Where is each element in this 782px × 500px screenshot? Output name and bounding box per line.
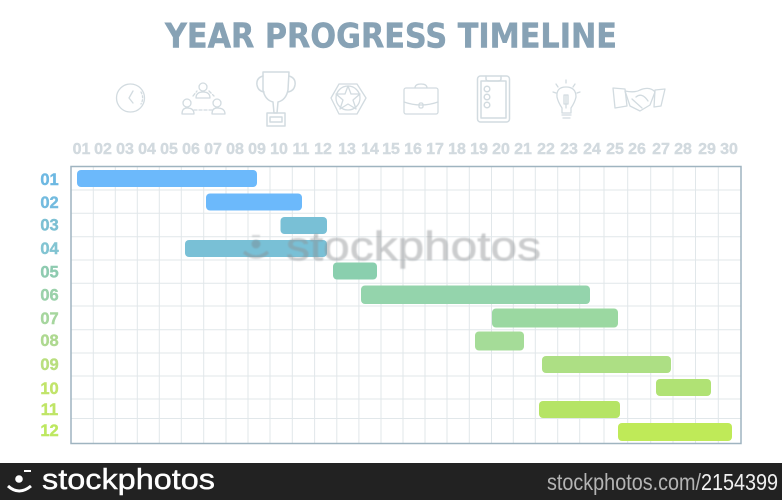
icon: handshake: [613, 88, 665, 111]
day number axis: 04: [138, 141, 156, 158]
gantt bars: [77, 170, 732, 441]
icon: clock: [116, 84, 144, 112]
month labels: 10: [40, 380, 59, 398]
icon row: [116, 72, 665, 126]
month labels: [40, 171, 59, 440]
day number axis: 03: [116, 141, 134, 158]
month labels: 11: [41, 401, 58, 419]
icon: briefcase: [404, 84, 438, 114]
day number axis: 22: [537, 141, 555, 158]
day number axis: 24: [583, 141, 601, 158]
icon: hexagon star badge: [331, 84, 366, 114]
day number axis: 05: [160, 141, 178, 158]
icon: clipboard checklist: [478, 76, 510, 122]
month labels: 07: [40, 310, 59, 328]
footer logo icon: [8, 470, 31, 491]
month labels: 01: [40, 171, 59, 189]
month labels: 03: [40, 216, 59, 234]
footer bar: [0, 463, 782, 500]
day number axis: 07: [204, 141, 222, 158]
day number axis: 18: [448, 141, 466, 158]
day number axis: 23: [560, 141, 578, 158]
watermark: stockphotos: [286, 223, 541, 269]
month labels: 05: [40, 264, 59, 282]
day number axis: 02: [94, 141, 112, 158]
day number axis: 20: [492, 141, 510, 158]
day number axis: 14: [361, 141, 379, 158]
day number axis: 26: [628, 141, 646, 158]
day number axis: 17: [426, 141, 444, 158]
footer logo text: stockphotos: [42, 464, 215, 496]
icon: team network: [182, 83, 225, 114]
day number axis: 28: [674, 141, 692, 158]
day number axis: 12: [314, 141, 332, 158]
day number axis: 16: [404, 141, 422, 158]
month labels: 02: [40, 194, 59, 212]
day number axis: 19: [470, 141, 488, 158]
day number axis: 06: [182, 141, 200, 158]
month labels: 04: [40, 240, 59, 258]
month labels: 09: [40, 356, 59, 374]
day number axis: 01: [73, 141, 90, 158]
title: YEAR PROGRESS TIMELINE: [164, 16, 617, 56]
month labels: 06: [40, 286, 59, 304]
icon: trophy: [257, 72, 295, 126]
month labels: 12: [40, 422, 59, 440]
day number axis: 15: [382, 141, 400, 158]
month labels: 08: [40, 332, 59, 350]
day number axis: 25: [606, 141, 624, 158]
day number axis: 08: [226, 141, 244, 158]
day number axis: 09: [248, 141, 266, 158]
day number axis: 27: [652, 141, 670, 158]
day number axis: 10: [270, 141, 288, 158]
gantt grid: [71, 166, 741, 444]
icon: light bulb: [553, 80, 580, 118]
day number axis: 13: [338, 141, 356, 158]
day number axis: [73, 141, 738, 158]
day number axis: 30: [720, 141, 738, 158]
day number axis: 11: [293, 141, 310, 158]
day number axis: 29: [698, 141, 716, 158]
day number axis: 21: [514, 141, 532, 158]
